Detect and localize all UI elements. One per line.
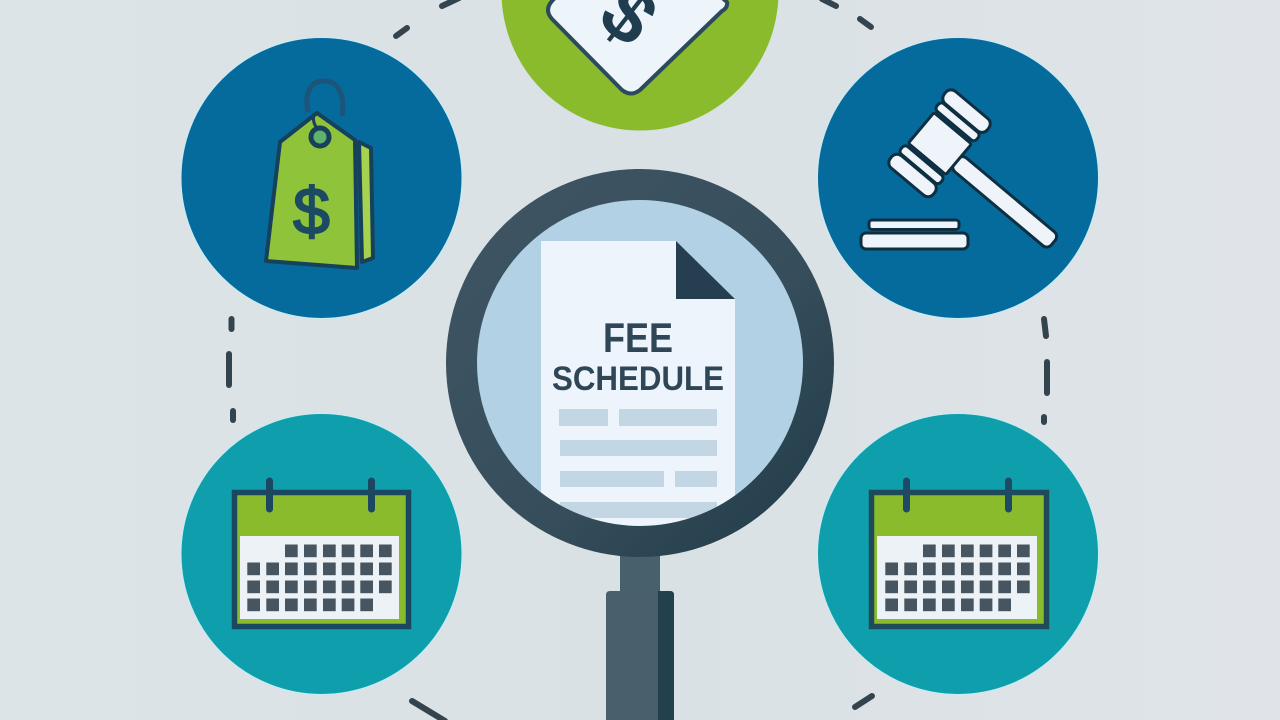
panel: gavel circle — [818, 38, 1098, 318]
icon: calendar — [234, 481, 408, 626]
panel: top price tag circle — [502, 0, 778, 130]
icon: white price tag — [548, 0, 727, 94]
panel: price tag circle — [181, 38, 462, 318]
document text lines — [559, 409, 717, 518]
document heading: FEE — [603, 314, 673, 361]
panel: right calendar circle — [818, 414, 1098, 694]
document corner fold — [676, 241, 735, 299]
document heading: SCHEDULE — [552, 360, 724, 398]
document heading — [552, 323, 723, 390]
magnifier handle — [606, 550, 674, 720]
dashed connector ring — [229, 0, 1047, 720]
icon: gavel — [861, 87, 1087, 279]
icon: green price tag: $ — [293, 174, 330, 248]
lens — [476, 199, 804, 527]
icon: calendar — [872, 481, 1046, 626]
fee schedule document — [541, 241, 735, 540]
magnifier ring — [462, 184, 818, 542]
panel: left calendar circle — [181, 414, 462, 694]
magnifying glass with fee schedule — [462, 184, 818, 720]
icon: green price tag — [266, 81, 373, 268]
